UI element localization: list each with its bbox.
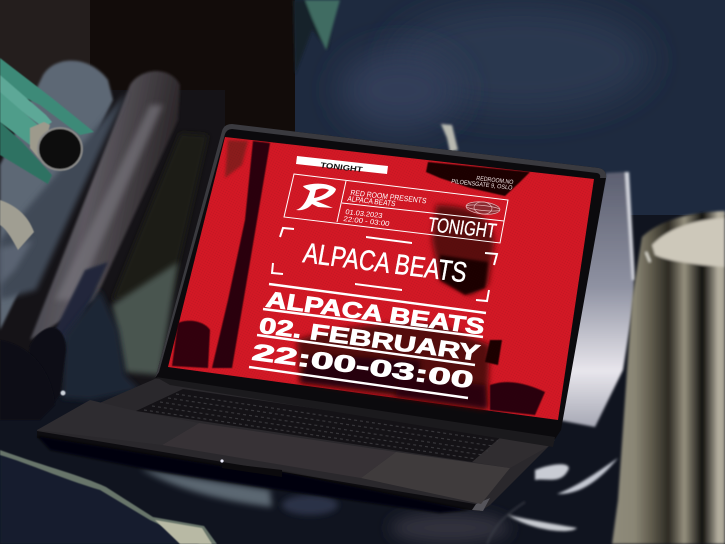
short rule above title — [366, 236, 412, 244]
address text: PILOENSGATE 9, OSLO — [451, 179, 513, 192]
dark blue curl at lower left — [0, 290, 140, 420]
foil reflections on the table — [140, 458, 618, 544]
address text: REDROOM.NO — [476, 176, 514, 186]
info box frame — [284, 174, 508, 243]
schedule: 02. FEBRUARY: 02. FEBRUARY — [257, 313, 482, 366]
silver foil behind the laptop — [558, 172, 635, 427]
top label: TONIGHT bar — [296, 156, 388, 174]
left palm rest — [37, 400, 199, 445]
info text: RED ROOM PRESENTS — [350, 188, 427, 205]
teal object behind the laptop — [293, 0, 340, 75]
laptop lid bezel — [155, 124, 606, 439]
short rule below title — [355, 283, 402, 291]
corner brackets — [272, 228, 497, 301]
icon: lens — [38, 128, 82, 170]
info text: 22:00 - 03:00 — [343, 215, 390, 228]
mug at right — [612, 211, 725, 544]
logo: R mark — [296, 184, 336, 210]
laptop base — [37, 378, 555, 513]
schedule: 22:00-03:00: 22:00-03:00 — [250, 339, 476, 393]
small white clip behind the lid — [441, 124, 458, 152]
trackpad — [162, 423, 396, 478]
TONIGHT large: TONIGHT — [426, 214, 498, 243]
keyboard — [136, 389, 502, 462]
screen — [168, 137, 594, 420]
navy cloth with green-cream fold at lower left — [0, 450, 217, 544]
indicator light — [220, 459, 224, 463]
icon: globe oval — [465, 200, 501, 216]
teal tool with round lens — [0, 58, 94, 184]
right keyboard margin — [472, 436, 551, 468]
title: ALPACA BEATS condensed: ALPACA BEATS — [301, 237, 469, 289]
halftone photo shapes — [172, 140, 545, 415]
laptop — [37, 124, 606, 513]
halftone dot overlay — [168, 137, 594, 420]
info text: 01.03.2023 — [345, 208, 383, 220]
screen red background — [168, 137, 594, 420]
glass cylinders — [0, 61, 180, 345]
right palm rest — [361, 452, 510, 504]
schedule: ALPACA BEATS: ALPACA BEATS — [264, 287, 487, 339]
top label: TONIGHT bar: TONIGHT — [320, 161, 364, 174]
rules for schedule — [249, 284, 486, 398]
dark green box at left of the lid — [112, 133, 208, 300]
mug rim — [652, 218, 725, 267]
info text: ALPACA BEATS — [347, 194, 396, 208]
info text — [343, 188, 427, 228]
